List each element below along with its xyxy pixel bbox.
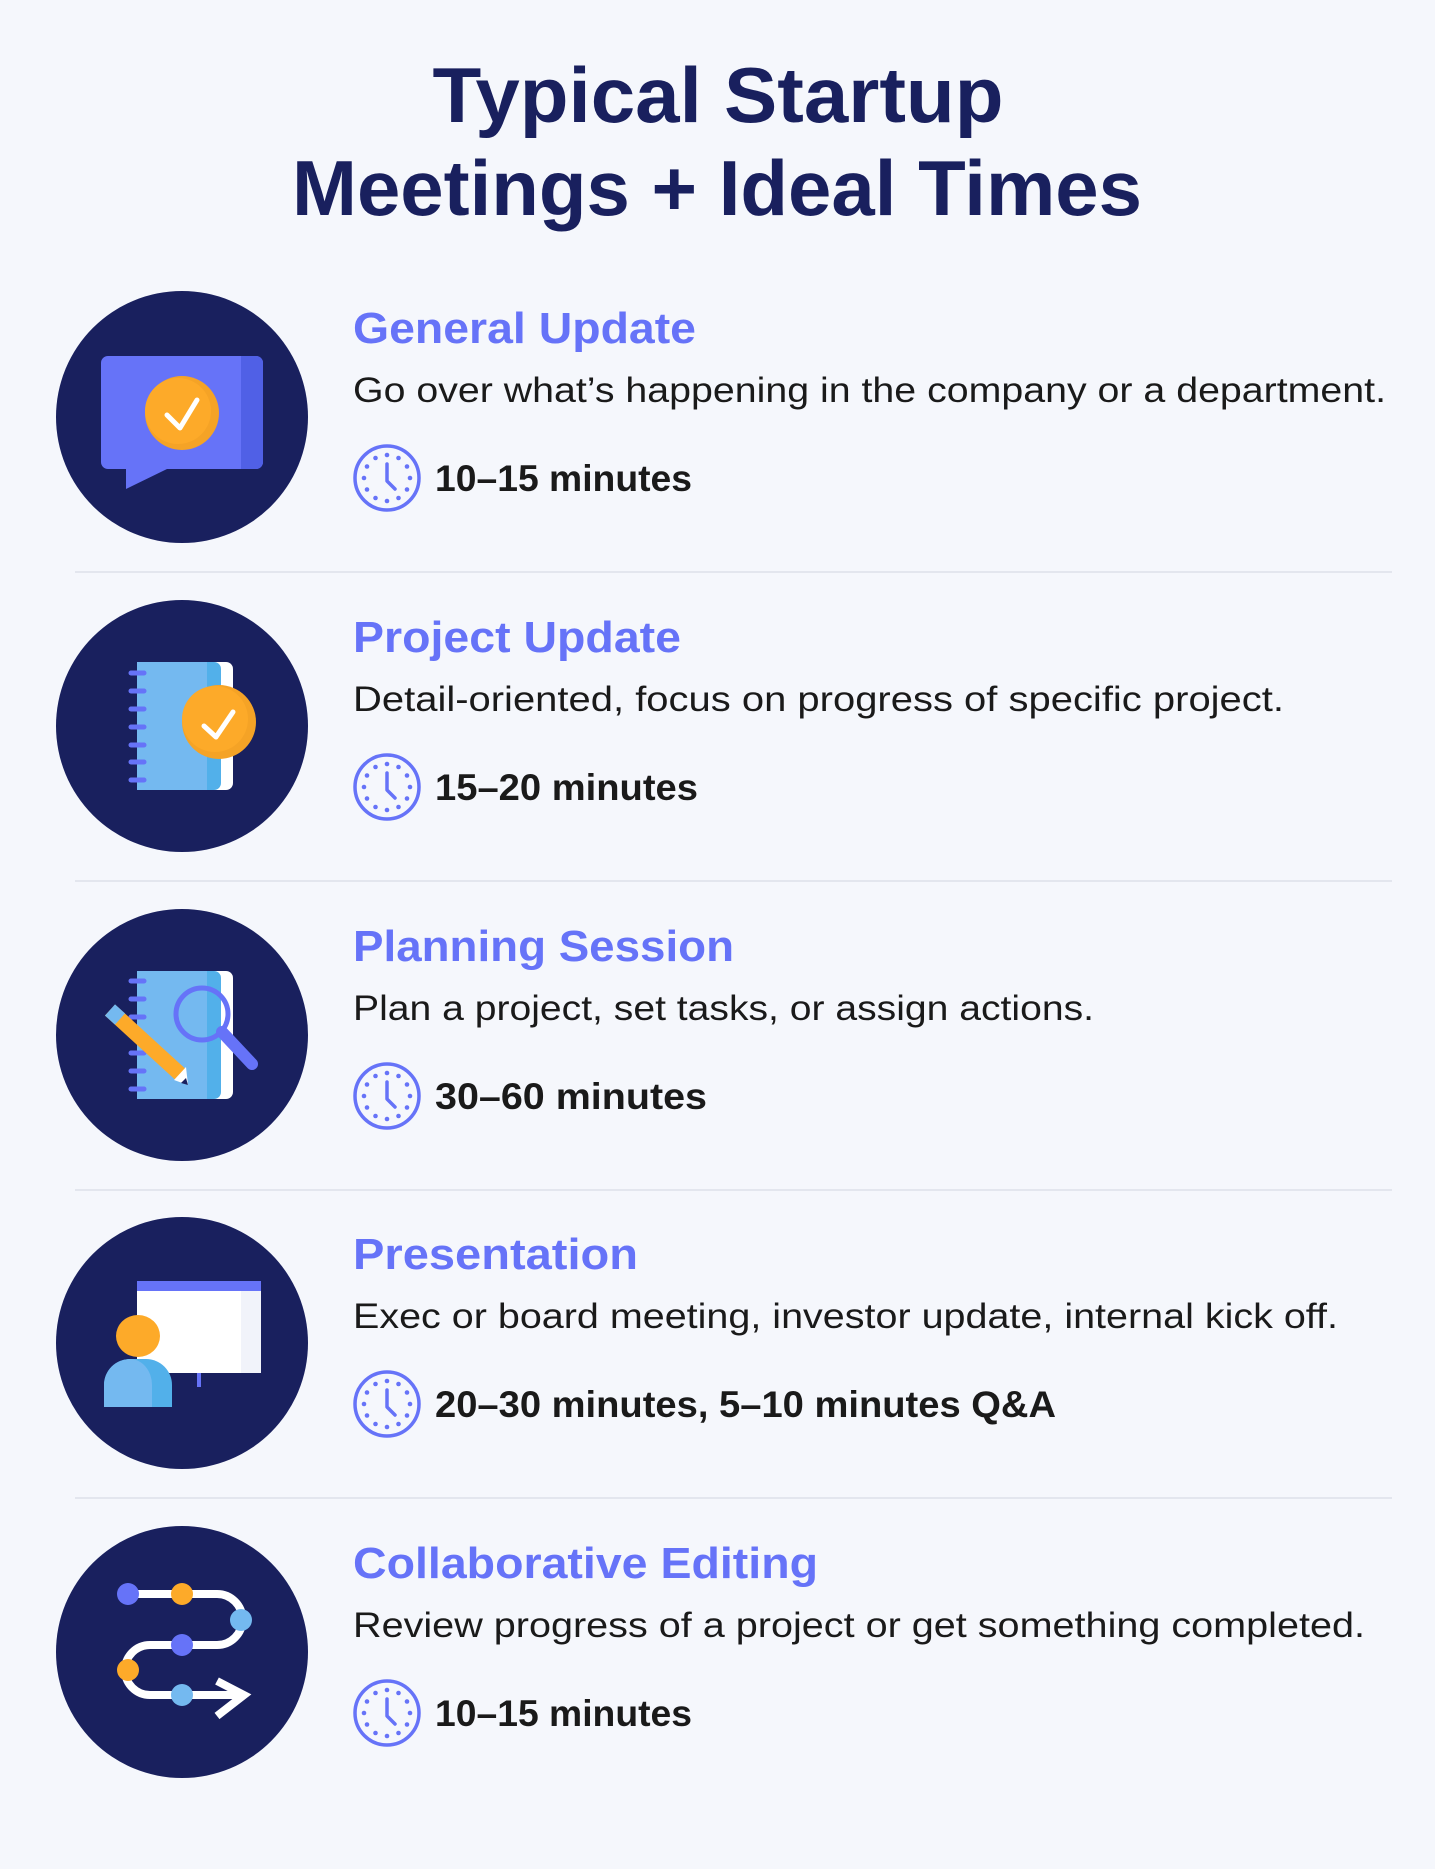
title [292, 51, 1142, 232]
heading: General Update [353, 304, 696, 353]
heading: Collaborative Editing [353, 1539, 818, 1588]
title: Meetings + Ideal Times [292, 144, 1142, 232]
heading: Planning Session [353, 922, 734, 971]
icon: clock [355, 1064, 419, 1128]
heading: Project Update [353, 613, 681, 662]
description: Exec or board meeting, investor update, internal kick off. [353, 1297, 1338, 1336]
icon: workflow path [56, 1526, 308, 1778]
description: Go over what’s happening in the company or a department. [353, 371, 1386, 410]
row: planning session [56, 909, 1094, 1161]
description: Review progress of a project or get something completed. [353, 1606, 1365, 1645]
row: general update [56, 291, 1386, 543]
icon: chat bubble with check [56, 291, 308, 543]
time: 10–15 minutes [435, 1693, 692, 1734]
description: Plan a project, set tasks, or assign actions. [353, 989, 1094, 1028]
icon: clock [355, 1681, 419, 1745]
icon: clock [355, 755, 419, 819]
row: collaborative editing [56, 1526, 1365, 1778]
time: 20–30 minutes, 5–10 minutes Q&A [435, 1384, 1056, 1425]
icon: clock [355, 1372, 419, 1436]
icon: clock [355, 446, 419, 510]
description: Detail-oriented, focus on progress of specific project. [353, 680, 1284, 719]
icon: notebook with check [56, 600, 308, 852]
title: Typical Startup [432, 51, 1004, 139]
time: 10–15 minutes [435, 458, 692, 499]
row: presentation [56, 1217, 1338, 1469]
time: 30–60 minutes [435, 1076, 707, 1117]
row: project update [56, 600, 1284, 852]
icon: presenter with board [56, 1217, 308, 1469]
heading: Presentation [353, 1230, 638, 1279]
icon: notebook with pencil and magnifier [56, 909, 308, 1161]
time: 15–20 minutes [435, 767, 698, 808]
